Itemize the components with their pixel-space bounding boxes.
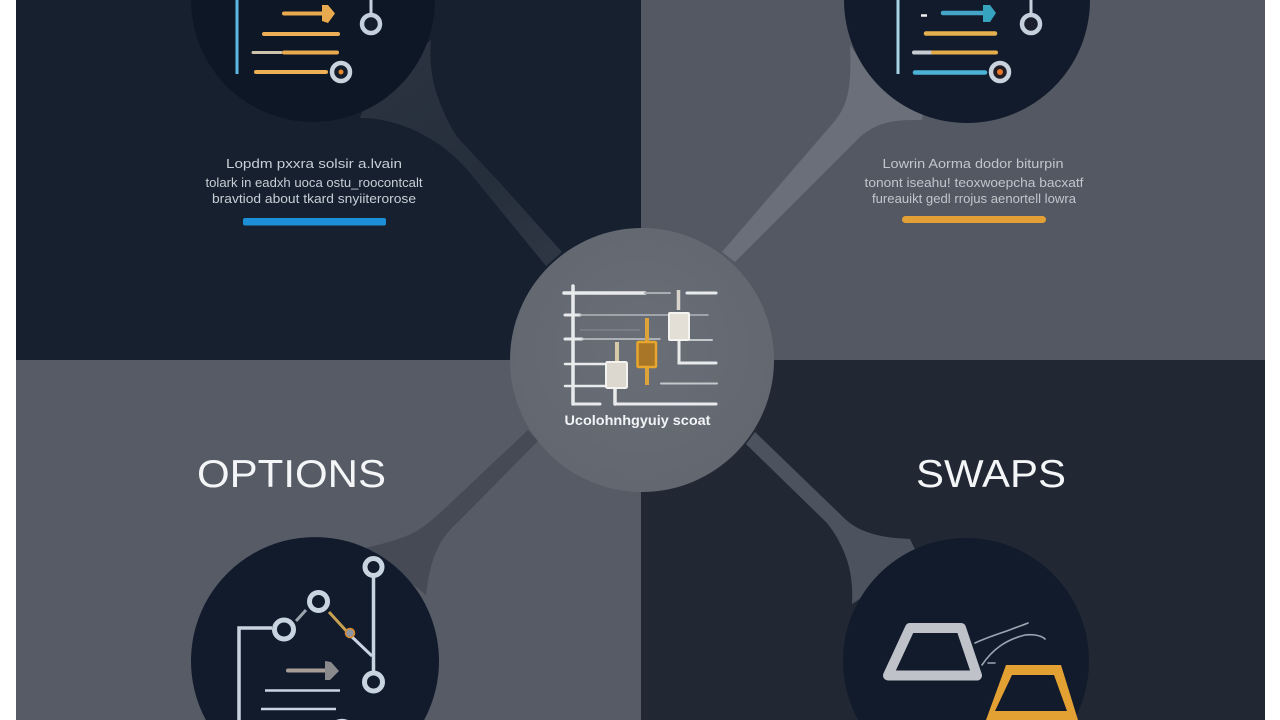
grey trapezoid bbox=[888, 628, 977, 676]
chart gridlines bbox=[564, 286, 717, 404]
accent bar: blue bbox=[243, 218, 386, 226]
panel: top left background bbox=[16, 0, 641, 360]
candlestick chart bbox=[564, 286, 717, 404]
margin: right bbox=[1265, 0, 1280, 720]
arrow bbox=[943, 5, 996, 22]
small dash bbox=[921, 14, 927, 17]
panel: top right background bbox=[641, 0, 1265, 360]
panel: bottom right background bbox=[641, 360, 1265, 720]
accent bar: orange bbox=[902, 216, 1046, 223]
connector: bottom right bbox=[746, 432, 920, 604]
connector: bottom left bbox=[360, 430, 538, 595]
text block: top right bbox=[864, 157, 1084, 206]
vertical axis bbox=[896, 0, 900, 74]
candle: low bbox=[606, 342, 627, 388]
icon disc bbox=[191, 0, 435, 122]
list line lower bbox=[261, 708, 336, 710]
group: bottom left circle icon bbox=[191, 537, 439, 720]
network lines bbox=[239, 576, 374, 720]
text block: top left: tolark in eadxh uoca ostu_roocontcalt bbox=[206, 176, 423, 190]
arrow bbox=[288, 661, 339, 680]
orange link bbox=[329, 612, 350, 635]
heading: options: OPTIONS bbox=[197, 453, 386, 496]
icon disc bbox=[191, 537, 439, 720]
node partly cut off at the bottom edge bbox=[336, 719, 348, 720]
arrow bbox=[284, 5, 335, 23]
text block: top right: tonont iseahu! teoxwoepcha bacxatf bbox=[864, 176, 1084, 190]
bars bbox=[253, 34, 338, 72]
vertical axis bbox=[236, 0, 238, 74]
margin: left bbox=[0, 0, 16, 720]
node bottom bbox=[332, 63, 350, 81]
node bottom bbox=[991, 63, 1009, 81]
nodes bbox=[274, 558, 382, 691]
icon disc bbox=[844, 0, 1090, 123]
panel: bottom left background bbox=[16, 360, 641, 720]
icon disc bbox=[843, 538, 1089, 720]
list lines bbox=[265, 689, 340, 692]
connector: top right bbox=[722, 45, 925, 262]
node top bbox=[362, 0, 380, 33]
connector: top left bbox=[360, 40, 562, 266]
group: top left circle icon bbox=[191, 0, 435, 122]
group: top right circle icon bbox=[844, 0, 1090, 123]
group: central hub bbox=[510, 228, 774, 492]
link dot bbox=[346, 628, 354, 638]
node top bbox=[1022, 0, 1040, 33]
text block: top left: bravtiod about tkard snyiiterorose bbox=[212, 192, 416, 206]
text block: top left: Lopdm pxxra solsir a.lvain bbox=[226, 157, 402, 171]
group: bottom right circle icon bbox=[843, 538, 1089, 720]
orange trapezoid bbox=[986, 665, 1078, 720]
candle: high bbox=[669, 290, 689, 340]
bars bbox=[914, 34, 996, 72]
hub disc bbox=[510, 228, 774, 492]
candle: mid bbox=[638, 318, 656, 385]
text block: top right: fureauikt gedl rrojus aenortell lowra bbox=[872, 192, 1076, 206]
heading: swaps: SWAPS bbox=[916, 453, 1066, 496]
text block: top right: Lowrin Aorma dodor biturpin bbox=[882, 157, 1064, 171]
hub caption: Ucolohnhgyuiy scoat bbox=[564, 412, 711, 428]
text block: top left bbox=[206, 157, 423, 206]
motion lines bbox=[975, 623, 1045, 665]
